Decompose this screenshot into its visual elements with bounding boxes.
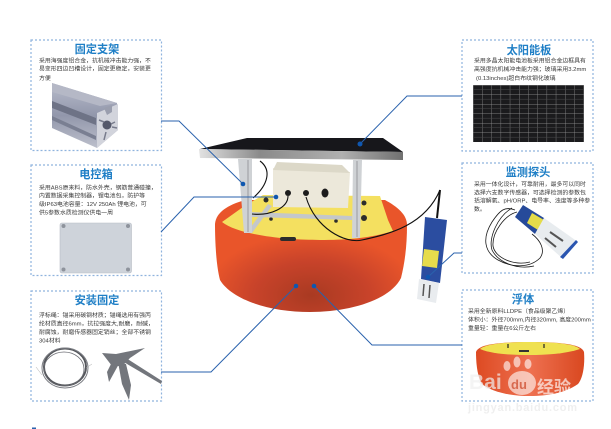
panel: monitoring probe [462,163,593,273]
heading: float body: 浮体 [512,292,535,306]
text: probe description: 选择六支数字传感器，可选择检测的参数包 [474,188,586,196]
panel: installation and mooring [31,291,162,401]
probe [417,190,447,303]
text: control box description [39,184,157,216]
text: installation description: 纶材质直径6mm，抗拉强度大,耐磨，耐碱， [39,320,154,328]
text: solar panel description [474,56,586,82]
text: probe description: 数。 [474,205,486,213]
text: float description: 体积小：外径700mm,内径320mm, 高度200mm [468,316,591,324]
buoy float body [215,200,407,312]
watermark: Baidu jingyan: Bai [469,371,502,394]
image: float [476,342,584,396]
text: control box description: 内置数据采集控制器，锂电池包，防护等 [39,192,145,200]
control box [273,162,350,208]
connector: probe [426,253,462,279]
solar panel top [200,138,403,152]
connector: installation [161,284,298,372]
image: anchor [102,348,162,400]
text: solar panel description: 高强度抗机械冲击能力强；玻璃采用3.2mm [474,65,586,73]
panel: float body [462,290,593,401]
text: mounting bracket description: 采用海强度铝合金，抗机械冲击能力强，不 [39,56,151,64]
text: mounting bracket description [39,56,151,82]
cables [252,161,440,241]
heading: mounting bracket: 固定支架 [75,42,119,56]
yellow deck [222,195,393,240]
text: probe description: 采用一体化设计，可靠耐用，最多可以同时 [474,180,586,188]
text: probe description [474,180,590,213]
deck bolts [264,198,367,223]
text: solar panel description: (0.13inches)超白布纹钢化玻璃 [476,74,556,82]
heading: monitoring probe: 监测探头 [506,165,550,179]
connector: solar panel [358,96,462,146]
watermark: Baidu jingyan [469,356,571,397]
text: control box description: 级IP63电池容量：12V 250Ah 锂电池，可 [39,200,147,208]
deck hatch [280,237,296,241]
heading: solar panel: 太阳能板 [507,43,551,57]
watermark: url: jingyan.baidu.com [467,402,577,414]
connector: control box [161,195,278,232]
solar panel frame [199,149,403,160]
text: installation description: 耐腐蚀，耐磨传感器固定销丝；全部不锈钢 [39,328,151,336]
text: mounting bracket description: 易变形四边凹槽设计，固定更稳定，安装更 [39,64,151,72]
image: probe with cable [486,205,578,267]
panel: solar panel [462,40,593,151]
image: solar cells [473,85,584,142]
heading: control box: 电控箱 [79,167,113,181]
text: control box description: 采用ABS原来料，防水外壳，钢筋普通碰撞， [39,184,157,192]
frame legs [238,159,362,238]
image: mooring rope coil [36,348,92,388]
connector: bracket [161,121,245,186]
text: installation description: 304材料 [39,336,61,344]
text: control box description: 供5参数水质检测仪供电一周 [39,208,113,216]
text: float description [468,307,591,332]
frame rails [250,204,352,233]
watermark: Baidu jingyan: 经验 [537,377,571,397]
watermark: Baidu jingyan: du [511,377,527,392]
panel: mounting bracket [31,40,162,150]
connector: float body [312,284,462,345]
illustration: water quality buoy [199,138,447,312]
heading: installation: 安装固定 [75,293,119,307]
panel: control box [31,165,162,276]
text: installation description: 浮标绳：锚采用碳钢材质；锚绳选用有强丙 [39,311,151,319]
image: enclosure lid [60,223,132,273]
text: installation description [39,311,154,344]
page mark [32,428,36,429]
text: float description: 采用全新原料LLDPE（食品级聚乙烯） [468,307,569,315]
text: mounting bracket description: 方便 [39,74,51,82]
text: float description: 重量轻：重量在6公斤左右 [468,324,536,332]
image: aluminium extrusion [52,83,118,148]
text: probe description: 括溶解氧、pH/ORP、电导率、浊度等多种参 [474,196,590,204]
text: solar panel description: 采用多晶太阳能电池板采用铝合金边框具有 [474,56,586,64]
